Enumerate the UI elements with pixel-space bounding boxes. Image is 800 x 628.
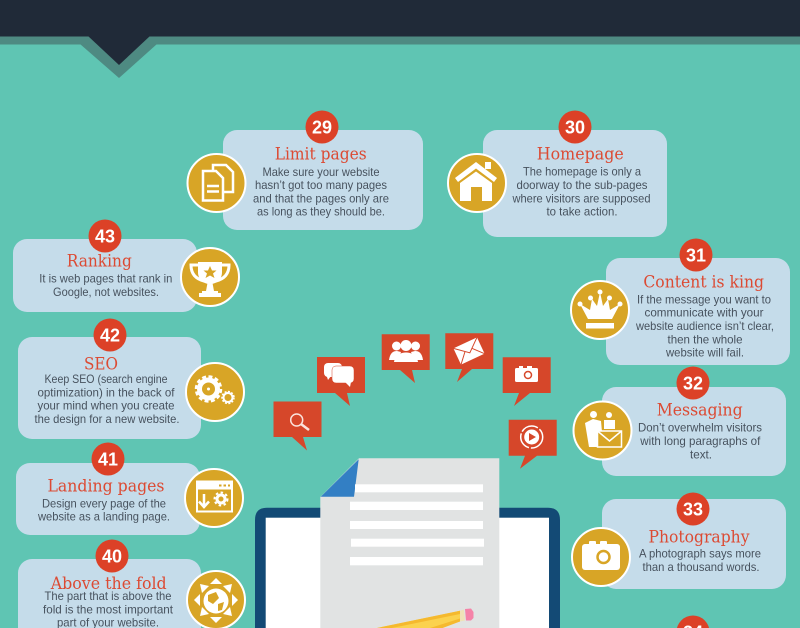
panel: 30 homepage: where visitors are supposed	[512, 191, 650, 205]
panel: 40 above the fold	[18, 540, 245, 628]
panel: 43 ranking: It is web pages that rank in	[39, 272, 172, 286]
panel: 42 seo	[18, 318, 244, 439]
panel: 31 content is king: Content is king	[643, 272, 764, 291]
panel: 29 limit pages: Limit pages	[275, 144, 367, 164]
document page	[320, 458, 499, 628]
panel: 33 photography: than a thousand words.	[642, 560, 760, 574]
speech bubble: camera	[503, 357, 551, 406]
speech bubble: video	[509, 420, 557, 469]
panel: 43 ranking: Google, not websites.	[53, 285, 159, 299]
panel: 33 photography: Photography	[648, 527, 750, 546]
speech bubble: chat	[317, 357, 365, 406]
speech bubble: people	[382, 334, 430, 383]
panel: 29 limit pages: 29	[312, 118, 332, 138]
panel: 41 landing pages: Landing pages	[48, 477, 164, 496]
panel: 29 limit pages: hasn’t got too many pages	[255, 178, 387, 192]
panel: 32 messaging: Messaging	[657, 401, 743, 420]
panel: 43 ranking	[13, 220, 239, 312]
panel: 32 messaging: with long paragraphs of	[639, 434, 761, 448]
speech bubble: search	[274, 402, 322, 450]
panel: 42 seo: your mind when you create	[38, 399, 175, 413]
panel: 29 limit pages: Make sure your website	[262, 165, 380, 179]
panel: 30 homepage: doorway to the sub-pages	[516, 178, 648, 192]
header banner	[0, 0, 800, 78]
panel: 33 photography	[572, 492, 786, 589]
panel: 41 landing pages: Design every page of the	[42, 496, 166, 510]
panel: 32 messaging	[574, 366, 786, 476]
panel: 41 landing pages: 41	[98, 450, 118, 470]
panel: 33 photography: A photograph says more	[639, 547, 761, 561]
panel: 32 messaging: Don’t overwhelm visitors	[638, 421, 762, 435]
pencil	[377, 608, 474, 628]
panel: 32 messaging: 32	[683, 374, 703, 394]
panel: 29 limit pages: and that the pages only are	[253, 191, 389, 205]
panel: 31 content is king	[571, 238, 790, 365]
panel: 40 above the fold: fold is the most important	[43, 602, 174, 616]
panel: 30 homepage: The homepage is only a	[523, 165, 641, 179]
panel: 30 homepage: Homepage	[537, 144, 624, 163]
panel: 32 messaging: text.	[690, 447, 712, 461]
panel: 31 content is king: then the whole	[668, 332, 743, 346]
panel: 43 ranking: Ranking	[67, 252, 132, 271]
panel: 29 limit pages: as long as they should be.	[257, 205, 385, 219]
panel: 42 seo: Keep SEO (search engine	[44, 372, 168, 386]
panel: 42 seo: SEO	[84, 354, 118, 373]
panel: 31 content is king: 31	[686, 246, 706, 266]
panel: 42 seo: the design for a new website.	[34, 412, 180, 426]
panel: 30 homepage	[448, 110, 667, 237]
panel: 31 content is king: website audience isn’t clear,	[635, 319, 774, 333]
panel: 31 content is king: If the message you want to	[637, 292, 771, 306]
panel: 41 landing pages: website as a landing page.	[37, 510, 170, 524]
speech bubble: mail	[445, 333, 493, 382]
panel: 29 limit pages	[188, 110, 423, 230]
panel: 42 seo: optimization) in the back of	[38, 385, 175, 399]
panel: 31 content is king: communicate with your	[644, 306, 764, 320]
panel: 30 homepage: 30	[565, 118, 585, 138]
panel: 40 above the fold: Above the fold	[50, 574, 167, 593]
laptop frame	[255, 508, 560, 628]
panel: 33 photography: 33	[683, 500, 703, 520]
panel: 40 above the fold: The part that is above the	[44, 589, 172, 603]
panel: 30 homepage: to take action.	[546, 205, 618, 219]
panel: 31 content is king: website will fail.	[665, 346, 744, 360]
panel: 43 ranking: 43	[95, 226, 115, 246]
panel: 42 seo: 42	[100, 326, 120, 346]
panel: 41 landing pages	[16, 442, 243, 535]
panel: 34 partial badge	[676, 616, 710, 628]
panel: 40 above the fold: 40	[102, 546, 122, 566]
